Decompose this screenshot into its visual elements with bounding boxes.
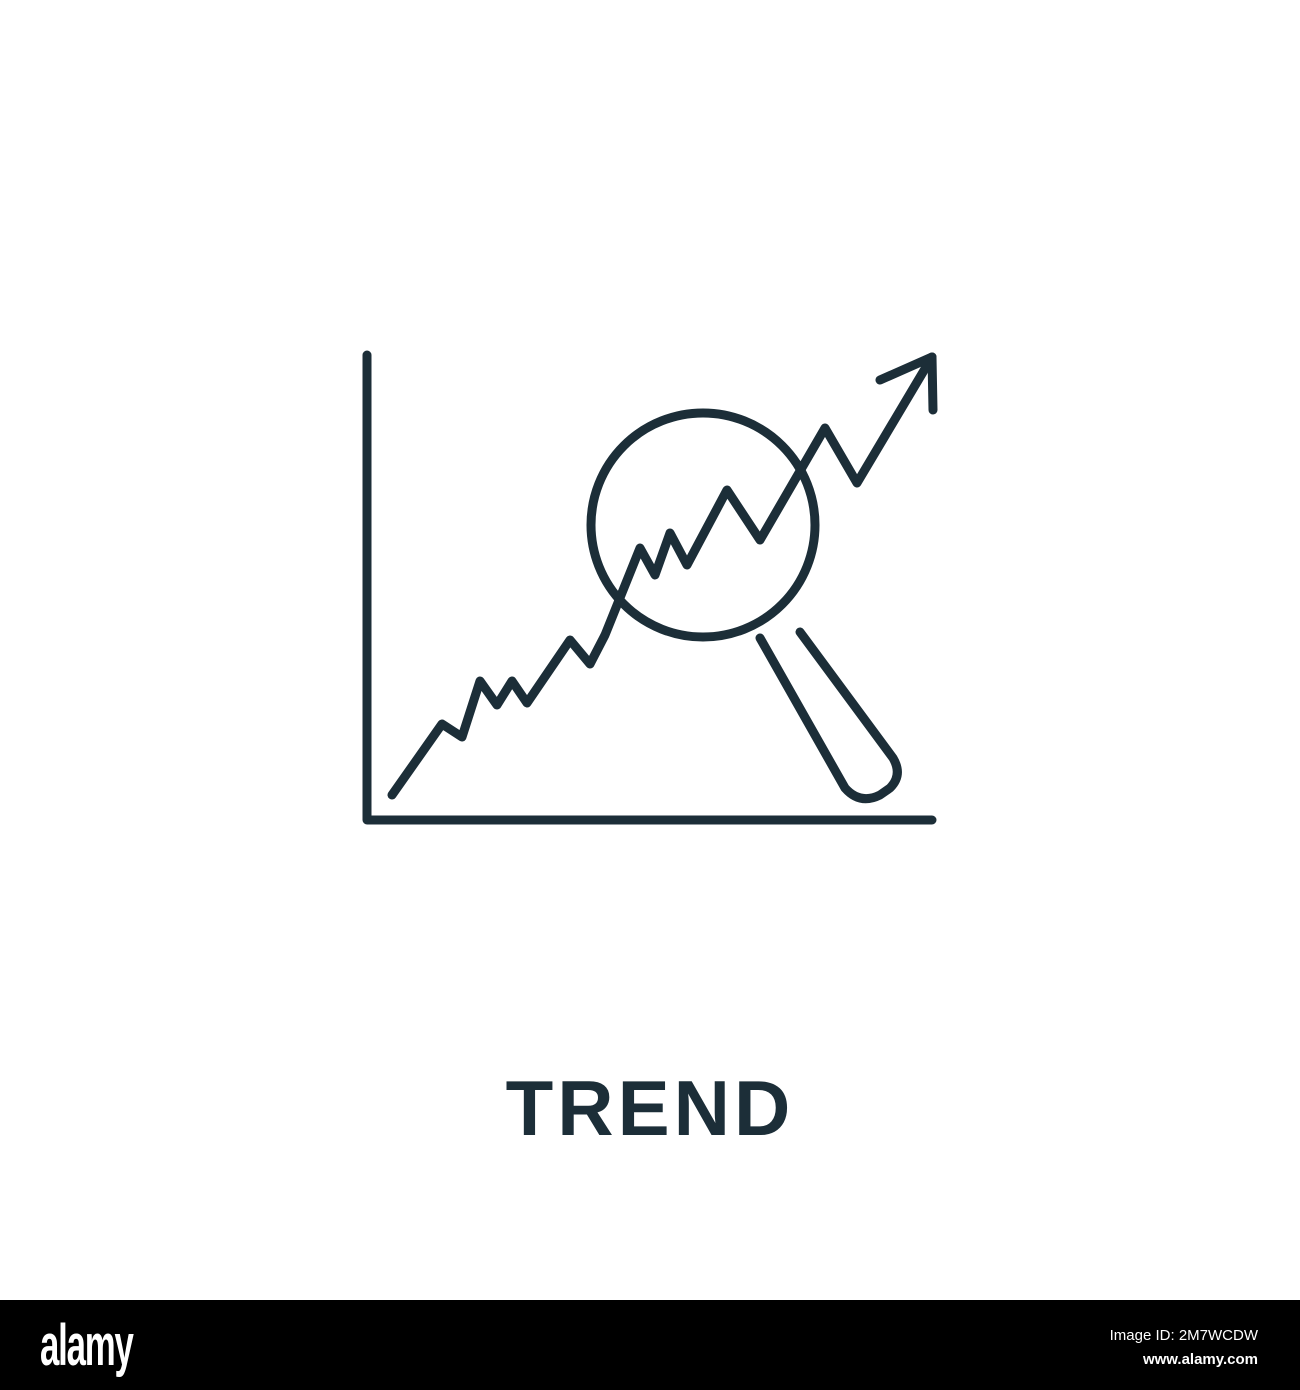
magnifier <box>591 413 897 799</box>
title: TREND: TREND <box>506 1064 794 1152</box>
footer bar <box>0 1300 1300 1390</box>
image id text: www.alamy.com <box>1143 1351 1258 1368</box>
arrowhead <box>880 357 933 410</box>
image id text: Image ID: 2M7WCDW <box>1110 1327 1258 1344</box>
logo: alamy: alamy <box>40 1313 133 1378</box>
image id text <box>1110 1327 1258 1368</box>
axes <box>367 355 932 820</box>
zigzag trend line <box>392 357 932 795</box>
